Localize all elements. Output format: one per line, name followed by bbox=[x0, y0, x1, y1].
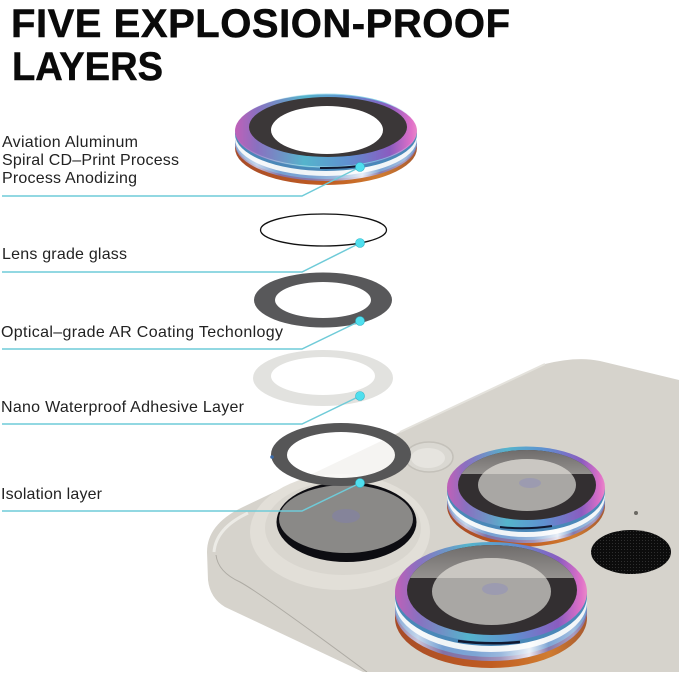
callout line 2 bbox=[2, 238, 364, 272]
callout line 4 bbox=[2, 392, 364, 424]
icon: isolation ring bbox=[270, 423, 411, 486]
callout line 5 bbox=[2, 478, 364, 511]
phone camera module bbox=[207, 359, 679, 672]
icon: AR coating ring bbox=[254, 272, 392, 328]
camera base bbox=[250, 474, 430, 590]
callout line 3 bbox=[2, 316, 364, 349]
icon: right lens bbox=[447, 446, 605, 546]
label: isolation: Isolation layer bbox=[1, 486, 103, 503]
label: adhesive: Nano Waterproof Adhesive Layer bbox=[1, 399, 245, 416]
title bbox=[11, 2, 510, 89]
icon: black lens bbox=[276, 482, 416, 562]
icon: lower lens bbox=[395, 542, 587, 668]
label: aviation aluminum bbox=[2, 134, 179, 187]
speaker bbox=[591, 530, 671, 574]
label: aviation aluminum: Process Anodizing bbox=[2, 170, 137, 187]
label: aviation aluminum: Spiral CD–Print Process bbox=[2, 152, 179, 169]
label: lens grade glass: Lens grade glass bbox=[2, 246, 127, 263]
icon: adhesive ring bbox=[253, 350, 393, 406]
icon: lens grade glass ring bbox=[260, 214, 386, 246]
label: AR coating: Optical–grade AR Coating Techonlogy bbox=[1, 324, 283, 341]
callout line 1 bbox=[2, 162, 364, 196]
microphone dot bbox=[634, 511, 638, 515]
title: FIVE EXPLOSION-PROOF bbox=[11, 2, 510, 46]
label: aviation aluminum: Aviation Aluminum bbox=[2, 134, 138, 151]
title: LAYERS bbox=[12, 45, 163, 89]
flash bbox=[405, 442, 453, 472]
white bottom strip bbox=[200, 672, 679, 679]
icon: aluminium ring bbox=[235, 94, 417, 185]
